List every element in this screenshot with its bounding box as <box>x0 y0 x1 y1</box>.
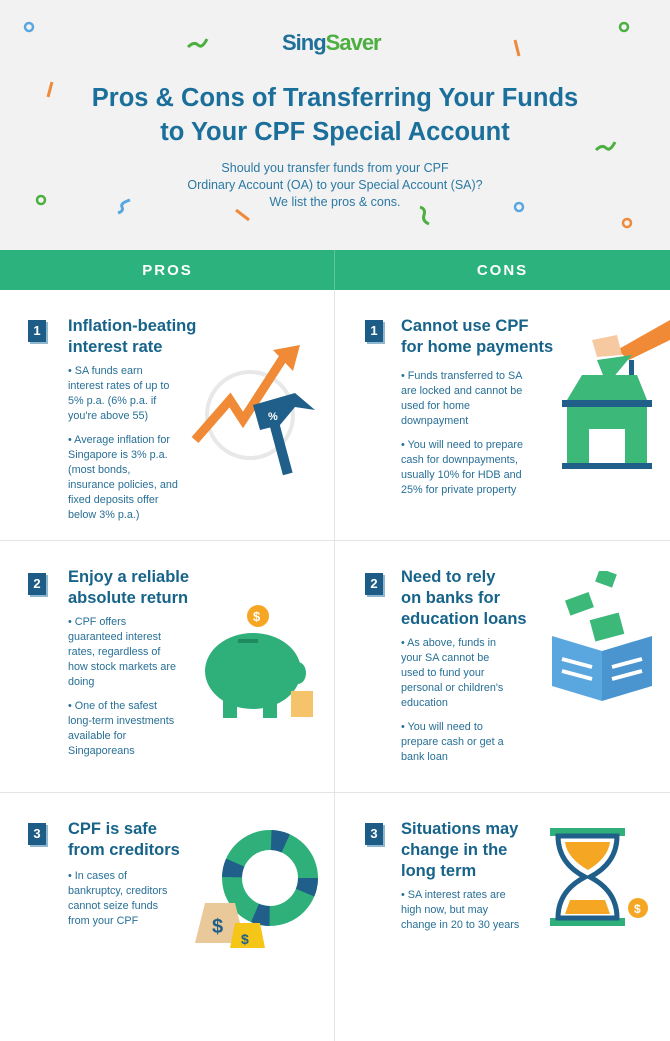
confetti decorations <box>24 22 632 228</box>
number 1: 1 <box>33 323 41 338</box>
text: long-term investments <box>68 715 174 727</box>
text: doing <box>68 676 94 688</box>
text: bank loan <box>401 751 448 763</box>
heading: interest rate <box>68 338 162 356</box>
text <box>401 889 519 931</box>
text <box>68 365 178 521</box>
icon: hourglass: $ <box>634 902 641 916</box>
panel: pro 2 <box>28 568 313 757</box>
text: cannot seize funds <box>68 900 158 912</box>
heading: for home payments <box>401 338 553 356</box>
text: • You will need to prepare <box>401 439 523 451</box>
text: (most bonds, <box>68 464 130 476</box>
heading: on banks for <box>401 589 500 607</box>
header band <box>0 250 670 290</box>
text <box>68 870 167 927</box>
subtitle: Should you transfer funds from your CPF <box>221 161 449 175</box>
subtitle <box>187 161 483 209</box>
heading <box>68 820 180 859</box>
panel: pro 1 <box>28 317 315 521</box>
number 1: 1 <box>370 323 378 338</box>
heading <box>401 568 527 628</box>
text: • Average inflation for <box>68 434 170 446</box>
text: • In cases of <box>68 870 127 882</box>
text: are locked and cannot be <box>401 385 522 397</box>
number 3: 3 <box>370 826 378 841</box>
icon: lifebuoy and money bags: $ <box>241 931 249 947</box>
text: below 3% p.a.) <box>68 509 139 521</box>
icon: lifebuoy and money bags <box>195 830 318 948</box>
heading: Situations may <box>401 820 518 838</box>
panel: con 2 <box>365 568 652 763</box>
text: guaranteed interest <box>68 631 161 643</box>
heading <box>401 317 553 356</box>
text: fixed deposits offer <box>68 494 158 506</box>
icon: hammer and arrow: % <box>268 411 278 423</box>
logo: SingSaver <box>282 30 381 55</box>
text: change in 20 to 30 years <box>401 919 519 931</box>
heading <box>401 820 518 880</box>
heading: change in the <box>401 841 507 859</box>
heading: long term <box>401 862 476 880</box>
number 3 <box>28 823 46 845</box>
text: bankruptcy, creditors <box>68 885 167 897</box>
heading: education loans <box>401 610 527 628</box>
text: Singapore is 3% p.a. <box>68 449 168 461</box>
text <box>401 370 523 496</box>
header background <box>0 0 670 250</box>
icon: piggy bank: $ <box>253 609 261 624</box>
text: available for <box>68 730 126 742</box>
icon: money house <box>562 320 670 469</box>
icon: hammer and arrow <box>192 345 315 476</box>
text: used for home <box>401 400 470 412</box>
number 2 <box>365 573 383 595</box>
text: downpayment <box>401 415 468 427</box>
title: to Your CPF Special Account <box>160 118 510 146</box>
number 2: 2 <box>370 576 378 591</box>
text: rates, regardless of <box>68 646 160 658</box>
text: usually 10% for HDB and <box>401 469 522 481</box>
text: from your CPF <box>68 915 138 927</box>
title: Pros & Cons of Transferring Your Funds <box>92 84 578 112</box>
text: 25% for private property <box>401 484 516 496</box>
header band: PROS <box>142 262 193 279</box>
icon: lifebuoy and money bags: $ <box>212 916 223 938</box>
text: • As above, funds in <box>401 637 496 649</box>
text: interest rates of up to <box>68 380 169 392</box>
heading: from creditors <box>68 841 180 859</box>
text: prepare cash or get a <box>401 736 504 748</box>
title <box>92 84 578 146</box>
heading <box>68 317 196 356</box>
subtitle: Ordinary Account (OA) to your Special Account (SA)? <box>187 178 483 192</box>
heading: Enjoy a reliable <box>68 568 189 586</box>
text: education <box>401 697 448 709</box>
heading: Cannot use CPF <box>401 317 528 335</box>
text <box>68 616 176 757</box>
text: how stock markets are <box>68 661 176 673</box>
text: cash for downpayments, <box>401 454 518 466</box>
heading: CPF is safe <box>68 820 157 838</box>
number 1 <box>28 320 46 342</box>
heading <box>68 568 189 607</box>
icon: piggy bank <box>205 605 313 718</box>
panel: con 1 <box>365 317 670 496</box>
text: your SA cannot be <box>401 652 489 664</box>
text: • One of the safest <box>68 700 157 712</box>
icon: hourglass <box>550 828 648 926</box>
number 1 <box>365 320 383 342</box>
text <box>401 637 504 763</box>
text: insurance policies, and <box>68 479 178 491</box>
header band: CONS <box>477 262 528 279</box>
text: • Funds transferred to SA <box>401 370 522 382</box>
number 2: 2 <box>33 576 41 591</box>
text: • You will need to <box>401 721 483 733</box>
subtitle: We list the pros & cons. <box>269 195 401 209</box>
text: high now, but may <box>401 904 488 916</box>
number 3: 3 <box>33 826 41 841</box>
text: used to fund your <box>401 667 484 679</box>
icon: book with money <box>552 571 652 701</box>
number 3 <box>365 823 383 845</box>
text: Singaporeans <box>68 745 135 757</box>
text: • SA funds earn <box>68 365 143 377</box>
number 2 <box>28 573 46 595</box>
text: you're above 55) <box>68 410 148 422</box>
heading: absolute return <box>68 589 188 607</box>
heading: Need to rely <box>401 568 495 586</box>
panel: pro 3 <box>28 820 318 948</box>
text: • SA interest rates are <box>401 889 506 901</box>
text: • CPF offers <box>68 616 126 628</box>
text: 5% p.a. (6% p.a. if <box>68 395 156 407</box>
heading: Inflation-beating <box>68 317 196 335</box>
panel: con 3 <box>365 820 648 931</box>
text: personal or children's <box>401 682 503 694</box>
